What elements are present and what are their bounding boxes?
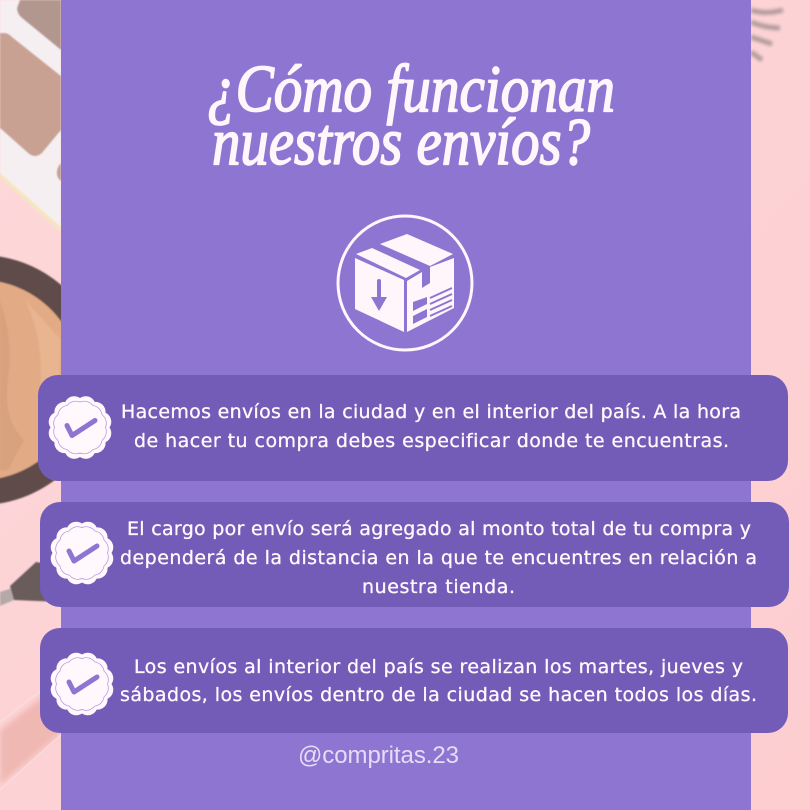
title (207, 52, 615, 179)
icon: check badge (51, 522, 113, 584)
panel: shipping charge (40, 502, 789, 607)
lip gloss (0, 675, 61, 790)
text block (120, 656, 757, 706)
panel: delivery days (40, 628, 788, 733)
text block: dependerá de la distancia en la que te encuentres en relación a (120, 547, 757, 569)
text block: El cargo por envío será agregado al monto total de tu compra y (127, 518, 751, 540)
title: ¿Cómo funcionan (207, 52, 615, 126)
icon: check badge (51, 653, 113, 715)
eyelashes (751, 10, 783, 60)
panel: city and interior shipping (38, 375, 788, 481)
title: nuestros envíos? (212, 105, 590, 179)
text block (120, 518, 757, 598)
box label (413, 297, 427, 311)
text block: nuestra tienda. (362, 576, 515, 598)
text block: sábados, los envíos dentro de la ciudad se hacen todos los días. (120, 684, 757, 706)
eyeshadow palette (0, 0, 61, 232)
text block: Hacemos envíos en la ciudad y en el interior del país. A la hora (121, 401, 741, 423)
text block: Los envíos al interior del país se realizan los martes, jueves y (134, 656, 743, 678)
icon: parcel box in circle (338, 216, 472, 350)
text block: de hacer tu compra debes especificar donde te encuentras. (134, 430, 729, 452)
text block (121, 401, 741, 452)
social handle: @compritas.23 (298, 742, 459, 769)
powder compact (0, 255, 105, 505)
arrow on box (377, 281, 381, 300)
icon: check badge (49, 396, 111, 459)
makeup brush (0, 562, 61, 606)
